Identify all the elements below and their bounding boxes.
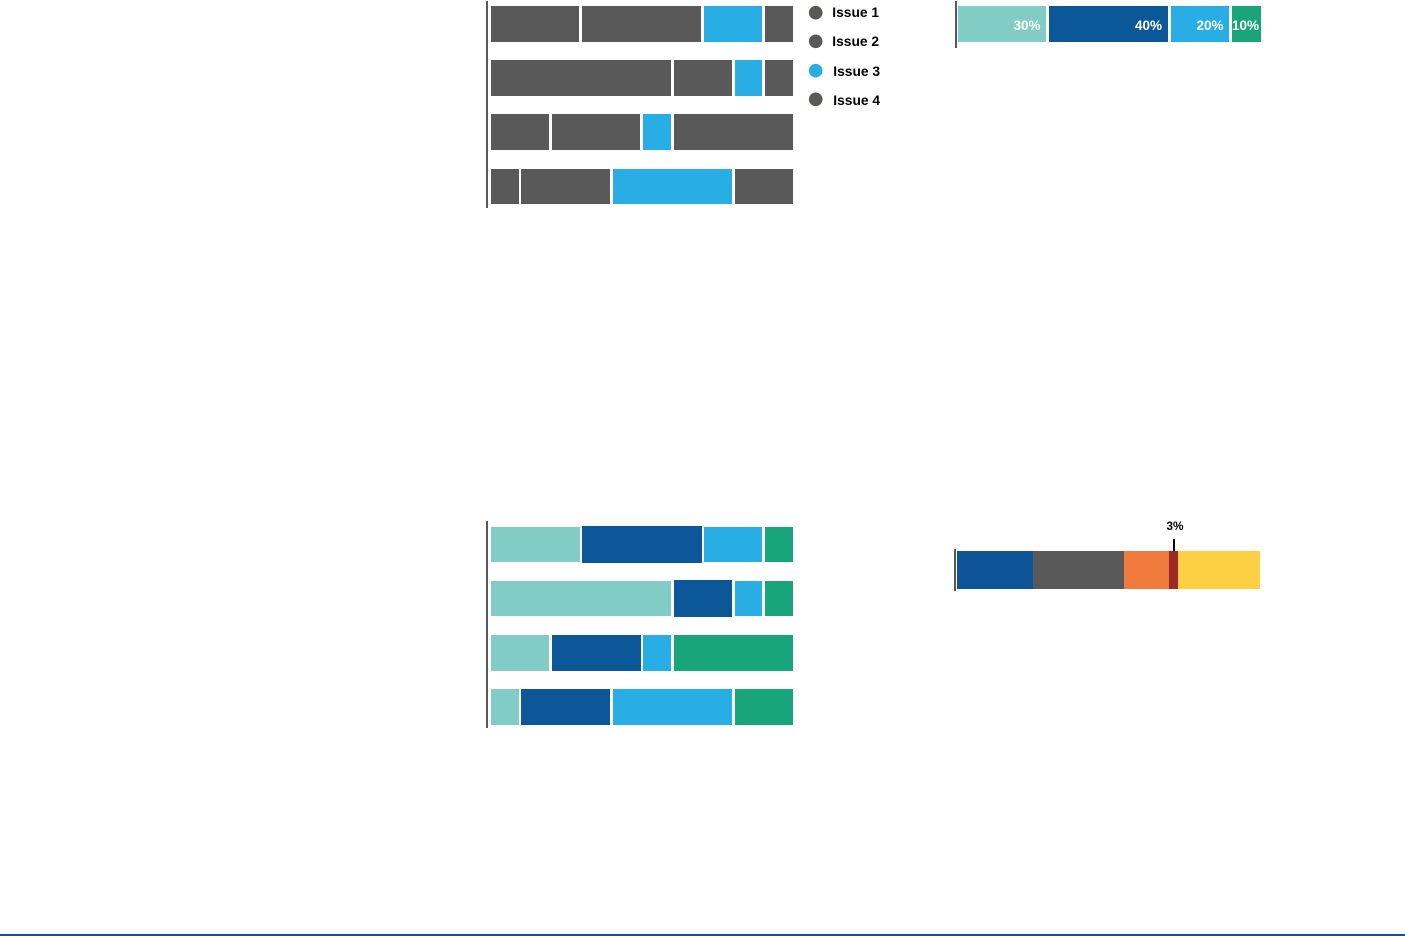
chart: single stacked bar with 3% callout xyxy=(954,519,1260,591)
legend: issues: Issue 1 xyxy=(832,5,879,20)
chart: single stacked bar with percentages: 30% xyxy=(1013,18,1040,33)
bar row 2 xyxy=(491,580,793,617)
legend: issues xyxy=(809,5,880,108)
bar row 2 xyxy=(491,60,793,96)
legend: issues: Issue 3 xyxy=(833,64,880,79)
bar row 1 xyxy=(491,526,793,563)
bar row 3 xyxy=(491,114,793,150)
chart: single stacked bar with percentages: 40% xyxy=(1135,18,1162,33)
legend: issues: Issue 4 xyxy=(833,93,880,108)
chart: single stacked bar with percentages: 20% xyxy=(1196,18,1224,33)
callout: 3%: 3% xyxy=(1166,519,1184,533)
chart: grey stacked bars highlighting issue 3 xyxy=(486,1,793,208)
chart: single stacked bar with percentages: 10% xyxy=(1232,18,1259,33)
bar row 1 xyxy=(491,6,793,42)
bar row 3 xyxy=(491,635,793,671)
legend: issues: Issue 2 xyxy=(832,34,879,49)
callout: 3% xyxy=(1166,519,1184,551)
chart: single stacked bar with percentages xyxy=(955,1,1261,48)
footer rule xyxy=(0,934,1405,936)
bar row 4 xyxy=(491,689,793,725)
chart: coloured stacked bars xyxy=(486,521,793,728)
bar row 4 xyxy=(491,169,793,204)
